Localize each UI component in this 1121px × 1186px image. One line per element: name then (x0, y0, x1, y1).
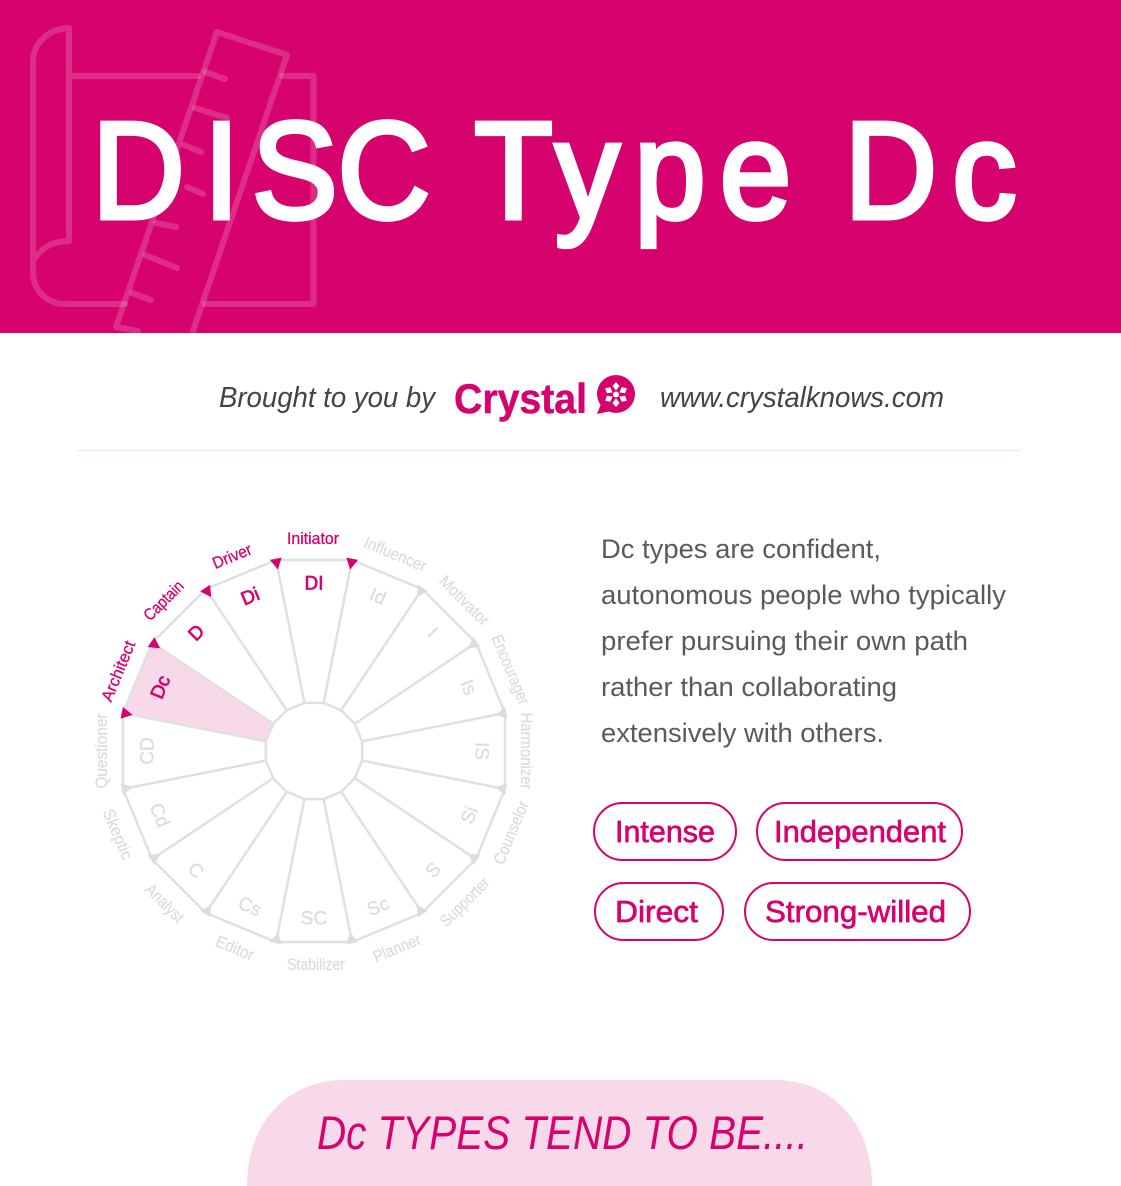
outer type names: Architect (98, 638, 139, 704)
segment codes: IS (470, 742, 491, 760)
segment codes: C (183, 859, 207, 883)
description paragraph: autonomous people who typically (601, 580, 1007, 610)
outer type names: Motivator (435, 572, 493, 630)
outer type names: Skeptic (99, 806, 136, 862)
outer type names: Planner (371, 930, 424, 966)
outer type names: Captain (140, 577, 188, 625)
header banner (0, 0, 1121, 333)
pill: Independent (757, 803, 962, 860)
trait pills (594, 803, 970, 940)
description paragraph: rather than collaborating (601, 672, 897, 702)
segment codes: Dc (147, 673, 175, 702)
description paragraph: prefer pursuing their own path (601, 626, 968, 656)
title: Dc (844, 94, 1016, 248)
outer type names (93, 530, 535, 974)
grey vertex markers (121, 585, 507, 944)
segment codes (138, 574, 491, 930)
description paragraph: Dc types are confident, (601, 534, 881, 564)
description paragraph: extensively with others. (601, 718, 884, 748)
outer type names: Initiator (287, 530, 339, 548)
segment codes: Cd (145, 800, 173, 831)
brought to you by: Brought to you by (219, 382, 436, 414)
section heading tab (247, 1080, 872, 1186)
wheel outline and spokes (123, 560, 505, 942)
outer type names: Questioner (93, 713, 111, 788)
DISC wheel chart (93, 530, 535, 974)
pink vertex markers (121, 558, 358, 721)
title: DISC (92, 94, 430, 248)
outer type names: Editor (213, 933, 257, 965)
pill: Strong-willed (745, 883, 970, 940)
website url: www.crystalknows.com (660, 382, 944, 414)
segment codes: CD (138, 737, 159, 765)
segment codes: Sc (364, 893, 393, 921)
segment codes: Id (366, 584, 389, 610)
segment codes: Cs (235, 893, 264, 921)
segment codes: Is (455, 677, 480, 698)
segment codes: Di (238, 584, 263, 610)
highlighted segment: Dc (123, 643, 273, 741)
outer type names: Driver (210, 540, 255, 573)
pill: Strong-willed: Strong-willed (765, 894, 946, 929)
pill: Intense: Intense (615, 814, 715, 849)
pill: Direct (595, 883, 723, 940)
outer type names: Influencer (361, 534, 430, 576)
pill: Direct: Direct (615, 894, 698, 929)
icon: blueprint scroll and ruler (33, 28, 314, 331)
segment codes: SC (301, 909, 327, 930)
segment codes: S (422, 859, 446, 883)
segment codes: Si (457, 804, 483, 827)
title (92, 94, 1016, 248)
segment codes: I (423, 624, 441, 642)
title: Type (474, 94, 791, 248)
pill: Independent: Independent (774, 814, 946, 849)
pill: Intense (594, 803, 736, 860)
attribution row (219, 375, 944, 422)
outer type names: Encourager (488, 632, 533, 708)
segment codes: DI (304, 574, 324, 595)
outer type names: Supporter (437, 874, 494, 930)
icon: Crystal speech bubble (597, 375, 635, 414)
outer type names: Analyst (141, 881, 188, 927)
logo wordmark: Crystal: Crystal (454, 375, 587, 422)
outer type names: Counselor (490, 798, 533, 867)
outer type names: Harmonizer (517, 712, 535, 790)
segment codes: D (185, 621, 209, 646)
description paragraph (601, 534, 1007, 748)
outer type names: Stabilizer (287, 956, 345, 974)
section heading tab: Dc TYPES TEND TO BE.... (317, 1106, 808, 1159)
